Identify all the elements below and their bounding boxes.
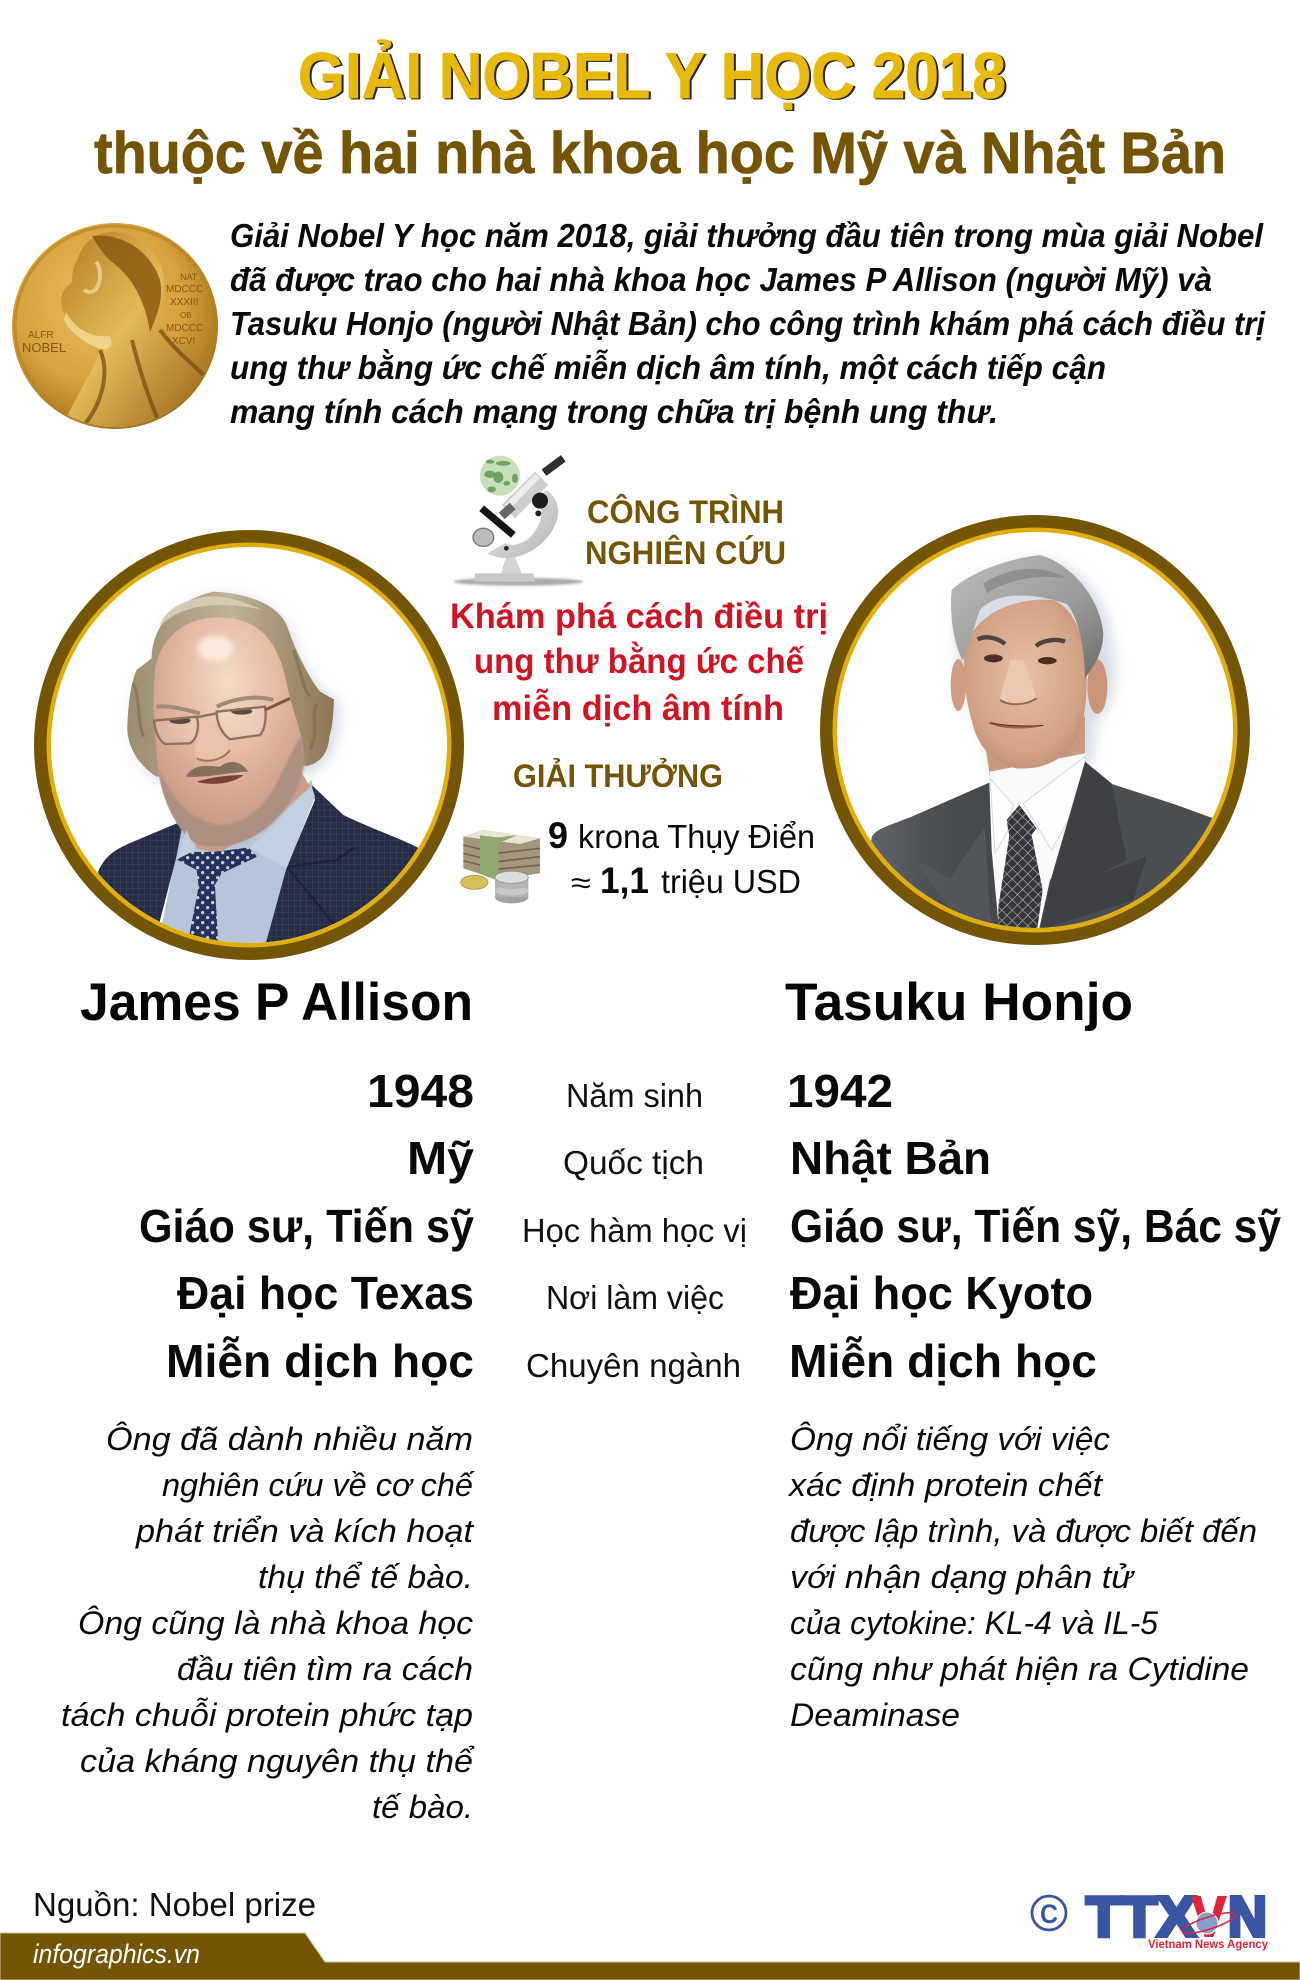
intro text — [230, 218, 1266, 431]
Honjo facts: Đại học Kyoto — [790, 1267, 1093, 1319]
Allison biography: nghiên cứu về cơ chế — [162, 1467, 475, 1503]
row labels: Nơi làm việc — [546, 1279, 724, 1316]
row labels: Quốc tịch — [563, 1144, 704, 1181]
intro text: ung thư bằng ức chế miễn dịch âm tính, một cách tiếp cận — [230, 349, 1106, 387]
mouth — [987, 723, 1045, 729]
Honjo biography: của cytokine: KL-4 và IL-5 — [790, 1605, 1159, 1641]
Allison biography: Ông đã dành nhiều năm — [106, 1420, 473, 1457]
tie — [1007, 805, 1037, 837]
Allison facts: Mỹ — [407, 1132, 474, 1184]
portrait: Tasuku Honjo — [826, 521, 1244, 940]
Allison facts — [139, 1065, 474, 1387]
heading: research work — [585, 494, 786, 571]
beard — [159, 737, 305, 847]
prize amount — [548, 815, 815, 901]
icon: Nobel medal: NAT — [180, 272, 198, 282]
title line 2: thuộc về hai nhà khoa học Mỹ và Nhật Bản — [94, 121, 1226, 186]
heading: research work: CÔNG TRÌNH — [587, 494, 784, 530]
icon: Nobel medal — [12, 223, 218, 430]
icon: Nobel medal: NOBEL — [22, 340, 66, 355]
eyes — [984, 654, 1003, 662]
icon: Nobel medal: MDCCC — [166, 323, 203, 334]
portrait: James P Allison — [40, 536, 458, 977]
row labels — [522, 1077, 747, 1384]
prize amount: 9 — [548, 815, 568, 856]
heading: research work: NGHIÊN CỨU — [585, 535, 786, 571]
prize amount: triệu USD — [661, 863, 801, 900]
footer bar — [0, 1933, 1300, 1980]
icon: Nobel medal: XCVI — [172, 336, 195, 347]
title — [94, 39, 1226, 186]
Allison biography — [61, 1420, 475, 1825]
logo: TTXVN — [1032, 1885, 1268, 1951]
eyes — [169, 718, 191, 724]
jacket right — [1037, 762, 1213, 940]
icon: money and coins — [461, 830, 540, 903]
row labels: Năm sinh — [566, 1077, 703, 1114]
Allison biography: thụ thể tế bào. — [258, 1559, 473, 1595]
Allison biography: tách chuỗi protein phức tạp — [61, 1697, 473, 1733]
source: Nguồn: Nobel prize — [33, 1886, 316, 1923]
name: James P Allison: James P Allison — [80, 973, 473, 1032]
neck — [986, 716, 1085, 777]
Honjo facts — [787, 1065, 1281, 1387]
Honjo biography: Deaminase — [790, 1697, 960, 1733]
Allison facts: Miễn dịch học — [166, 1335, 474, 1387]
Allison biography: phát triển và kích hoạt — [135, 1513, 475, 1549]
icon: Nobel medal: MDCCC — [166, 284, 203, 295]
Allison facts: Đại học Texas — [177, 1267, 474, 1319]
icon: Nobel medal: XXXIII — [170, 297, 198, 308]
eyebrows — [157, 698, 273, 713]
shirt — [990, 753, 1085, 805]
shirt — [157, 780, 315, 950]
row labels: Chuyên ngành — [526, 1347, 741, 1384]
logo: TTXVN: V — [1192, 1885, 1226, 1949]
row labels: Học hàm học vị — [522, 1212, 747, 1249]
ring — [826, 521, 1244, 939]
Allison biography: Ông cũng là nhà khoa học — [78, 1604, 473, 1641]
tie — [177, 847, 257, 887]
Allison facts: Giáo sư, Tiến sỹ — [139, 1200, 474, 1252]
glasses — [154, 698, 290, 744]
neck — [195, 772, 310, 852]
Honjo biography: cũng như phát hiện ra Cytidine — [790, 1651, 1249, 1687]
icon: microscope — [453, 456, 583, 586]
heading: prize: GIẢI THƯỞNG — [513, 758, 723, 794]
research description: miễn dịch âm tính — [492, 688, 784, 728]
Allison biography: tế bào. — [372, 1789, 473, 1825]
Honjo biography: với nhận dạng phân tử — [790, 1559, 1136, 1595]
Allison biography: đầu tiên tìm ra cách — [177, 1651, 473, 1687]
Honjo facts: Miễn dịch học — [789, 1335, 1097, 1387]
Honjo biography — [787, 1420, 1257, 1733]
footer site label: infographics.vn — [33, 1939, 200, 1969]
Honjo facts: 1942 — [787, 1065, 893, 1117]
Allison biography: của kháng nguyên thụ thể — [80, 1743, 475, 1779]
prize amount: krona Thụy Điển — [578, 818, 815, 855]
icon: Nobel medal: ALFR — [28, 330, 54, 341]
prize amount: 1,1 — [600, 860, 649, 901]
Allison facts: 1948 — [367, 1065, 474, 1117]
Honjo biography: xác định protein chết — [787, 1467, 1104, 1503]
face — [964, 600, 1087, 769]
jacket left — [98, 823, 182, 922]
logo: TTXVN: TTX — [1086, 1885, 1196, 1949]
eyebrows — [978, 637, 1065, 646]
Honjo facts: Nhật Bản — [790, 1132, 991, 1184]
moustache — [186, 762, 248, 777]
face — [154, 617, 303, 847]
icon: Nobel medal: OB — [180, 311, 192, 320]
research description: ung thư bằng ức chế — [474, 641, 805, 681]
ring — [40, 536, 458, 954]
jacket left — [871, 782, 998, 924]
nose — [196, 738, 222, 760]
Honjo biography: Ông nổi tiếng với việc — [790, 1420, 1110, 1457]
logo: TTXVN: Vietnam News Agency — [1148, 1937, 1268, 1951]
title line 1: GIẢI NOBEL Y HỌC 2018 — [298, 39, 1006, 112]
research description — [450, 597, 828, 728]
intro text: đã được trao cho hai nhà khoa học James P Allison (người Mỹ) và — [230, 262, 1212, 299]
intro text: mang tính cách mạng trong chữa trị bệnh ung thư. — [230, 394, 998, 431]
Honjo biography: được lập trình, và được biết đến — [790, 1513, 1257, 1549]
ears — [951, 659, 966, 711]
hair — [951, 555, 1103, 678]
prize amount: ≈ — [571, 867, 591, 900]
logo: TTXVN: C — [1040, 1899, 1058, 1929]
hair — [127, 592, 334, 777]
logo: TTXVN: N — [1228, 1885, 1267, 1949]
jacket right — [266, 785, 418, 942]
nose — [1000, 660, 1037, 704]
name: Tasuku Honjo: Tasuku Honjo — [785, 973, 1133, 1032]
research description: Khám phá cách điều trị — [450, 597, 828, 636]
